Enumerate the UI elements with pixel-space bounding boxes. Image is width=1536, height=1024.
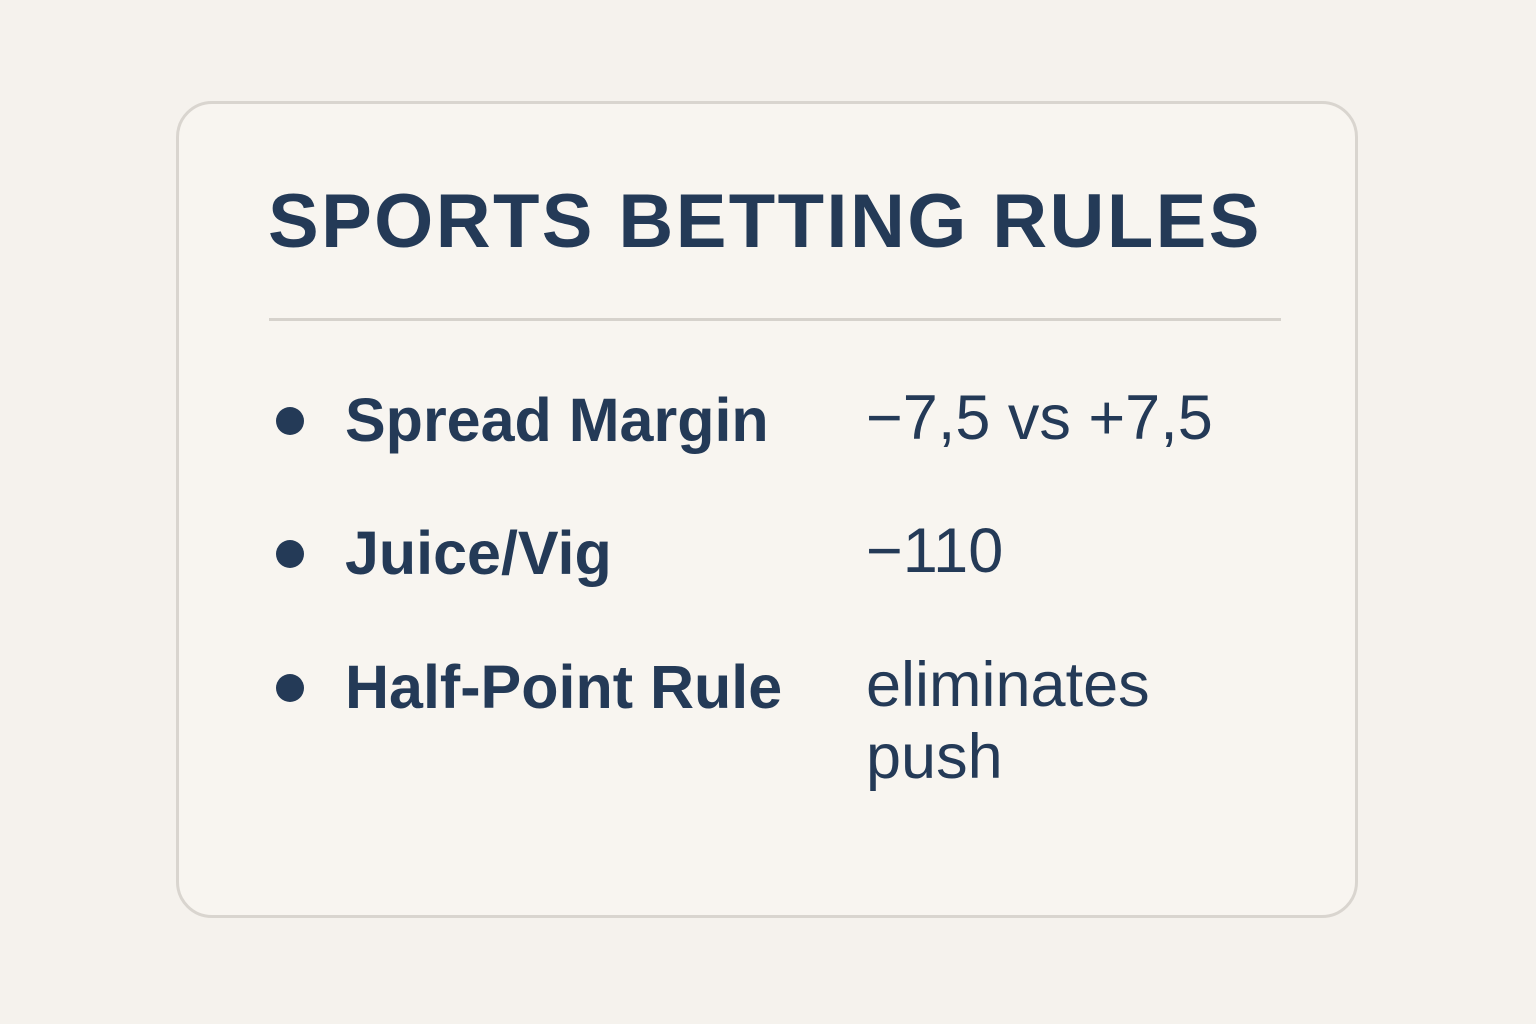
row: juice/vig <box>276 516 1003 587</box>
row: half-point rule: Half-Point Rule <box>345 653 782 721</box>
row: juice/vig: −110 <box>866 516 1003 586</box>
panel: rules card <box>176 101 1358 918</box>
row: spread margin: Spread Margin <box>345 386 769 454</box>
row: half-point rule <box>276 650 1150 792</box>
row: half-point rule: eliminates <box>866 650 1150 720</box>
row: juice/vig: Juice/Vig <box>345 519 612 587</box>
row: spread margin <box>276 383 1213 454</box>
row: half-point rule: push <box>866 722 1003 792</box>
title: SPORTS BETTING RULES <box>268 179 1262 264</box>
row: spread margin: −7,5 vs +7,5 <box>866 383 1213 453</box>
